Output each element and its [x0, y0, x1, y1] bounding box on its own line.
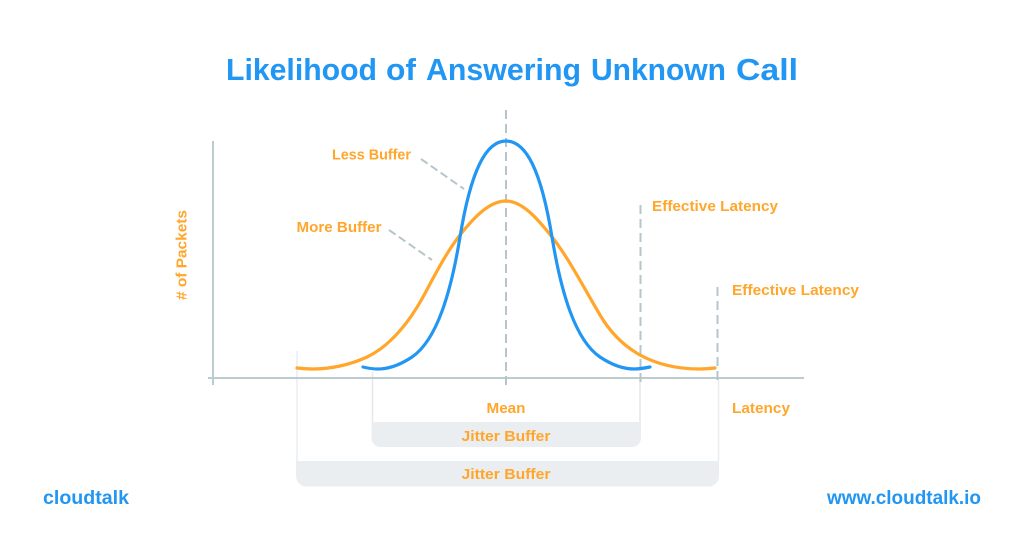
y axis — [212, 141, 214, 385]
leader line: less buffer — [421, 159, 464, 189]
label: more buffer: More Buffer — [296, 220, 382, 236]
jitter buffer bracket: narrow — [372, 372, 641, 447]
label: less buffer: Less Buffer — [332, 148, 411, 164]
leader line: more buffer — [389, 230, 432, 260]
title: Call — [736, 52, 798, 87]
jitter buffer bracket: wide — [296, 351, 719, 486]
blue curve: less buffer — [363, 141, 650, 369]
effective latency dashed line: less buffer — [640, 205, 642, 385]
label: mean: Mean — [486, 401, 526, 417]
title: Likelihood — [226, 52, 377, 87]
title: Unknown — [591, 52, 726, 87]
brand: cloudtalk logo: cloudtalk — [43, 487, 129, 509]
label: effective latency 2: Effective Latency — [732, 283, 859, 299]
title — [226, 52, 798, 87]
jitter buffer bracket: wide: Jitter Buffer — [462, 467, 551, 483]
chart: latency distribution — [208, 110, 804, 486]
jitter buffer bracket: narrow: Jitter Buffer — [462, 429, 551, 445]
x axis — [208, 377, 804, 379]
label: latency: Latency — [732, 401, 790, 417]
title: Answering — [426, 52, 581, 87]
mean dashed line — [505, 110, 507, 385]
footer url: www.cloudtalk.io — [826, 487, 981, 509]
label: number of packets: # of Packets — [174, 210, 190, 300]
orange curve: more buffer — [297, 201, 715, 369]
label: effective latency 1: Effective Latency — [652, 199, 778, 215]
title: of — [386, 52, 417, 87]
effective latency dashed line: more buffer — [716, 287, 718, 385]
